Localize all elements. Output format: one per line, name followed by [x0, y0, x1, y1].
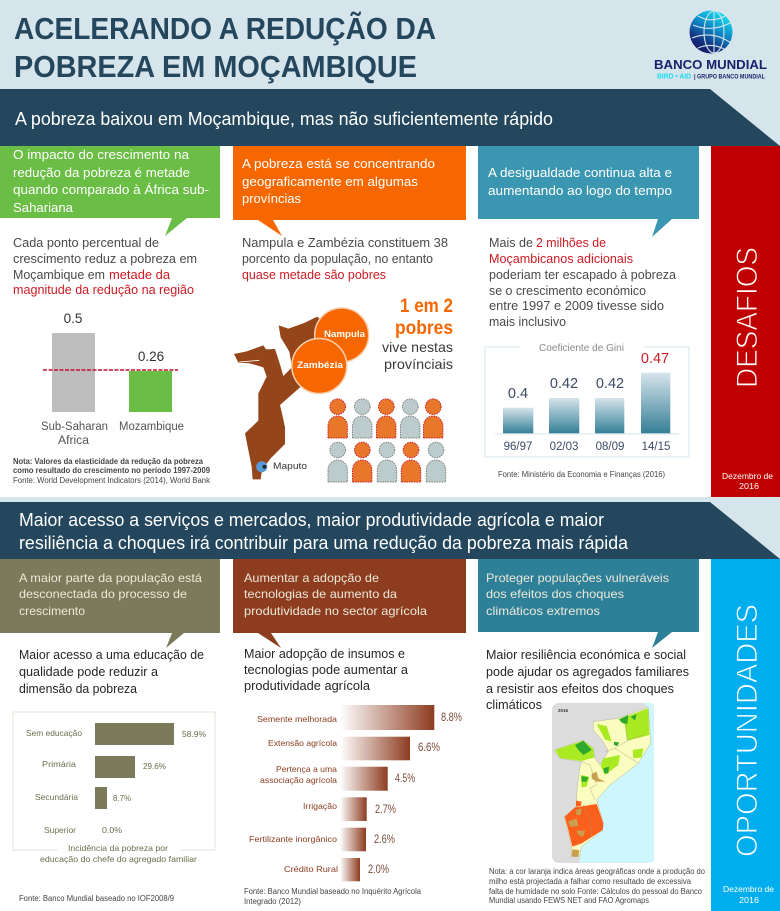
- map label: Nampula: [315, 308, 369, 362]
- text block: 2 million additional: poderiam ter escapado à pobreza: [489, 268, 676, 282]
- bar chart: poverty elasticity: Mozambique: [119, 421, 184, 433]
- callout: green growth impact: quando comparado à África sub-: [13, 182, 209, 197]
- bar chart: poverty elasticity: 0.26: [138, 349, 164, 364]
- callout: 1 in 2 poor: vive nestas: [382, 339, 453, 355]
- map label: Nampula: Nampula: [324, 329, 366, 340]
- note: chart source: [13, 457, 211, 485]
- note: chart source: Nota: Valores da elasticidade da redução da pobreza: [13, 457, 204, 466]
- note: map source: falta de humidade no solo Fonte: Cálculos do pessoal do Banco: [489, 887, 703, 896]
- bar chart: poverty by education: Secundária: [35, 792, 78, 802]
- logo: Banco Mundial: [654, 10, 767, 80]
- bar chart: agricultural productivity: 4.5%: [395, 771, 415, 785]
- text block: education: qualidade pode reduzir a: [19, 665, 158, 679]
- banner: section 2 heading: [0, 502, 780, 559]
- callout: olive population: crescimento: [19, 604, 85, 618]
- text block: growth elasticity: magnitude da redução na região: [13, 283, 194, 297]
- bar chart: poverty elasticity: Sub-Saharan: [41, 421, 108, 433]
- map: maize failure forecast: 2016: [558, 708, 569, 713]
- callout: orange geographic concentration: geograficamente em algumas: [242, 175, 418, 189]
- note: map source: Mundial usando FEWS NET and FAO Agromaps: [489, 896, 649, 905]
- note: map source: [489, 867, 706, 905]
- note: chart source: como resultado do crescimento no período 1997-2009: [13, 466, 211, 475]
- text block: inputs and technology: Maior adopção de insumos e: [244, 647, 405, 661]
- callout: olive population: desconectada do processo de: [19, 587, 187, 601]
- banner: section 1 heading: [0, 89, 780, 146]
- text block: growth elasticity: metade da: [109, 268, 170, 282]
- text block: Nampula and Zambezia: quase metade são pobres: [242, 268, 386, 282]
- bar chart: agricultural productivity: 2.0%: [368, 862, 389, 876]
- text block: resilience: [486, 648, 689, 712]
- bar chart: poverty by education: Primária: [42, 759, 76, 769]
- bar chart: poverty by education: 58.9%: [182, 729, 206, 739]
- map label: Zambezia: Zambézia: [297, 360, 344, 371]
- note: agriculture source: [244, 887, 422, 906]
- title: POBREZA EM MOÇAMBIQUE: [14, 49, 417, 84]
- text block: inputs and technology: produtividade agrícola: [244, 679, 370, 693]
- bar chart: poverty by education: Superior: [44, 825, 76, 835]
- callout: teal vulnerable: Proteger populações vulneráveis: [486, 571, 669, 585]
- text block: Nampula and Zambezia: [242, 236, 448, 282]
- panel: DESAFIOS side column: Dezembro de: [722, 471, 773, 481]
- bar chart: poverty by education: educação do chefe do agregado familiar: [40, 854, 197, 864]
- banner: section 2 heading: Maior acesso a serviços e mercados, maior produtividade agrícola e maior: [19, 510, 604, 530]
- text block: Nampula and Zambezia: Nampula e Zambézia constituem 38: [242, 236, 448, 250]
- text block: 2 million additional: Mais de: [489, 236, 533, 250]
- icon: people pictogram: [328, 399, 446, 482]
- callout: 1 in 2 poor: [382, 296, 453, 372]
- map: Mozambique provinces: [234, 308, 369, 479]
- text block: growth elasticity: Moçambique em: [13, 268, 105, 282]
- text block: education: [19, 648, 204, 696]
- bar chart: agricultural productivity: [249, 705, 462, 881]
- panel: DESAFIOS side column: [711, 146, 780, 497]
- callout: orange geographic concentration: A pobreza está se concentrando: [242, 157, 435, 171]
- logo: Banco Mundial: | GRUPO BANCO MUNDIAL: [694, 74, 765, 80]
- title: ACELERANDO A REDUÇÃO DA: [14, 11, 436, 46]
- text block: Nampula and Zambezia: porcento da população, no entanto: [242, 252, 433, 266]
- banner: section 1 heading: A pobreza baixou em Moçambique, mas não suficientemente rápido: [15, 108, 553, 129]
- text block: resilience: pode ajudar os agregados familiares: [486, 665, 689, 679]
- callout: 1 in 2 poor: 1 em 2: [400, 296, 453, 317]
- note: education source: Fonte: Banco Mundial baseado no IOF2008/9: [19, 894, 175, 903]
- text block: 2 million additional: mais inclusivo: [489, 315, 566, 329]
- text block: 2 million additional: 2 milhões de: [536, 236, 606, 250]
- callout: orange geographic concentration: [233, 146, 466, 236]
- bar chart: Gini coefficient: 08/09: [596, 441, 624, 453]
- bar chart: agricultural productivity: associação agrícola: [260, 775, 337, 785]
- bar chart: agricultural productivity: 8.8%: [441, 710, 462, 724]
- panel: OPORTUNIDADES side column: 2016: [739, 895, 759, 905]
- bar chart: poverty elasticity: 0.5: [64, 311, 82, 326]
- note: Gini source: Fonte: Ministério da Economia e Finanças (2016): [498, 470, 665, 479]
- bar chart: Gini coefficient: [485, 343, 689, 457]
- note: map source: Nota: a cor laranja indica áreas geográficas onde a produção do: [489, 867, 706, 876]
- bar chart: agricultural productivity: Pertença a uma: [276, 764, 337, 774]
- callout: brown technology: tecnologias de aumento da: [244, 587, 397, 601]
- text block: education: dimensão da pobreza: [19, 682, 137, 696]
- text block: growth elasticity: crescimento reduz a pobreza em: [13, 252, 197, 266]
- callout: teal vulnerable: dos efeitos dos choques: [486, 587, 624, 601]
- panel: OPORTUNIDADES side column: OPORTUNIDADES: [731, 604, 764, 857]
- text block: 2 million additional: se o crescimento económico: [489, 284, 646, 298]
- text block: inputs and technology: tecnologias pode aumentar a: [244, 663, 408, 677]
- bar chart: agricultural productivity: Extensão agrícola: [268, 738, 337, 748]
- text block: growth elasticity: Cada ponto percentual de: [13, 236, 159, 250]
- callout: teal inequality: A desigualdade continua alta e: [488, 166, 672, 180]
- bar chart: poverty by education: 0.0%: [102, 825, 122, 835]
- callout: 1 in 2 poor: pobres: [395, 318, 453, 339]
- callout: olive population: A maior parte da população está: [19, 571, 202, 585]
- text block: growth elasticity: [13, 236, 197, 297]
- bar chart: agricultural productivity: Fertilizante inorgânico: [249, 834, 337, 844]
- bar chart: agricultural productivity: 2.6%: [374, 832, 395, 846]
- callout: 1 in 2 poor: provínciais: [384, 356, 453, 372]
- bar chart: agricultural productivity: 2.7%: [375, 802, 396, 816]
- note: chart source: Fonte: World Development Indicators (2014), World Bank: [13, 476, 211, 485]
- callout: orange geographic concentration: províncias: [242, 192, 301, 206]
- bar chart: Gini coefficient: 02/03: [550, 441, 578, 453]
- text block: 2 million additional: Moçambicanos adicionais: [489, 252, 633, 266]
- map label: Zambezia: [292, 338, 347, 394]
- callout: green growth impact: O impacto do crescimento na: [13, 148, 189, 162]
- bar chart: poverty by education: [13, 712, 215, 864]
- bar chart: agricultural productivity: Irrigação: [303, 801, 337, 811]
- bar chart: poverty by education: 29.6%: [143, 761, 166, 771]
- callout: teal inequality: [478, 146, 699, 237]
- title: [14, 11, 436, 84]
- bar chart: agricultural productivity: Crédito Rural: [284, 864, 338, 874]
- callout: brown technology: Aumentar a adopção de: [244, 571, 379, 585]
- callout: brown technology: [233, 559, 466, 648]
- callout: brown technology: produtividade no sector agrícola: [244, 604, 427, 618]
- callout: olive population: [0, 559, 220, 648]
- bar chart: agricultural productivity: 6.6%: [418, 740, 440, 754]
- bar chart: Gini coefficient: 0.42: [550, 376, 578, 392]
- callout: teal vulnerable: climáticos extremos: [486, 604, 600, 618]
- note: map source: milho está projectada a falhar como resultado de excessiva: [489, 877, 692, 886]
- map: maize failure forecast: [552, 703, 654, 863]
- text block: education: Maior acesso a uma educação de: [19, 648, 204, 662]
- callout: green growth impact: redução da pobreza é metade: [13, 166, 190, 180]
- panel: DESAFIOS side column: DESAFIOS: [731, 247, 764, 388]
- bar chart: poverty by education: Sem educação: [26, 728, 82, 738]
- logo: Banco Mundial: BIRD • AID: [657, 74, 691, 80]
- note: agriculture source: Fonte: Banco Mundial baseado no Inquérito Agrícola: [244, 887, 422, 896]
- bar chart: agricultural productivity: Semente melhorada: [257, 714, 337, 724]
- bar chart: Gini coefficient: Coeficiente de Gini: [539, 343, 624, 354]
- note: agriculture source: Integrado (2012): [244, 897, 301, 906]
- panel: DESAFIOS side column: 2016: [739, 481, 759, 491]
- callout: teal inequality: aumentando ao logo do tempo: [488, 184, 672, 198]
- text block: 2 million additional: entre 1997 e 2009 tivesse sido: [489, 299, 664, 313]
- logo: Banco Mundial: BANCO MUNDIAL: [654, 57, 767, 72]
- bar chart: poverty by education: Incidência da pobreza por: [68, 843, 168, 853]
- bar chart: Gini coefficient: 0.42: [596, 376, 624, 392]
- text block: 2 million additional: [489, 236, 676, 329]
- text block: resilience: a resistir aos efeitos dos choques: [486, 682, 674, 696]
- bar chart: poverty by education: 8.7%: [113, 793, 131, 803]
- bar chart: Gini coefficient: 14/15: [642, 441, 670, 453]
- bar chart: Gini coefficient: 96/97: [504, 441, 532, 453]
- text block: resilience: Maior resiliência económica e social: [486, 648, 686, 662]
- panel: OPORTUNIDADES side column: Dezembro de: [723, 884, 774, 894]
- text block: inputs and technology: [244, 647, 408, 693]
- banner: section 2 heading: resiliência a choques irá contribuir para uma redução da pobreza mais rápida: [19, 533, 629, 553]
- bar chart: poverty elasticity: Africa: [58, 435, 90, 447]
- bar chart: poverty elasticity: [41, 311, 184, 447]
- callout: teal vulnerable: [478, 559, 699, 648]
- map label: Maputo: Maputo: [273, 461, 307, 472]
- panel: OPORTUNIDADES side column: [711, 559, 780, 911]
- callout: green growth impact: Sahariana: [13, 201, 73, 215]
- callout: green growth impact: [0, 146, 220, 236]
- text block: resilience: climáticos: [486, 698, 542, 712]
- map label: Maputo: [256, 461, 307, 472]
- bar chart: Gini coefficient: 0.4: [508, 386, 528, 402]
- bar chart: Gini coefficient: 0.47: [641, 351, 669, 367]
